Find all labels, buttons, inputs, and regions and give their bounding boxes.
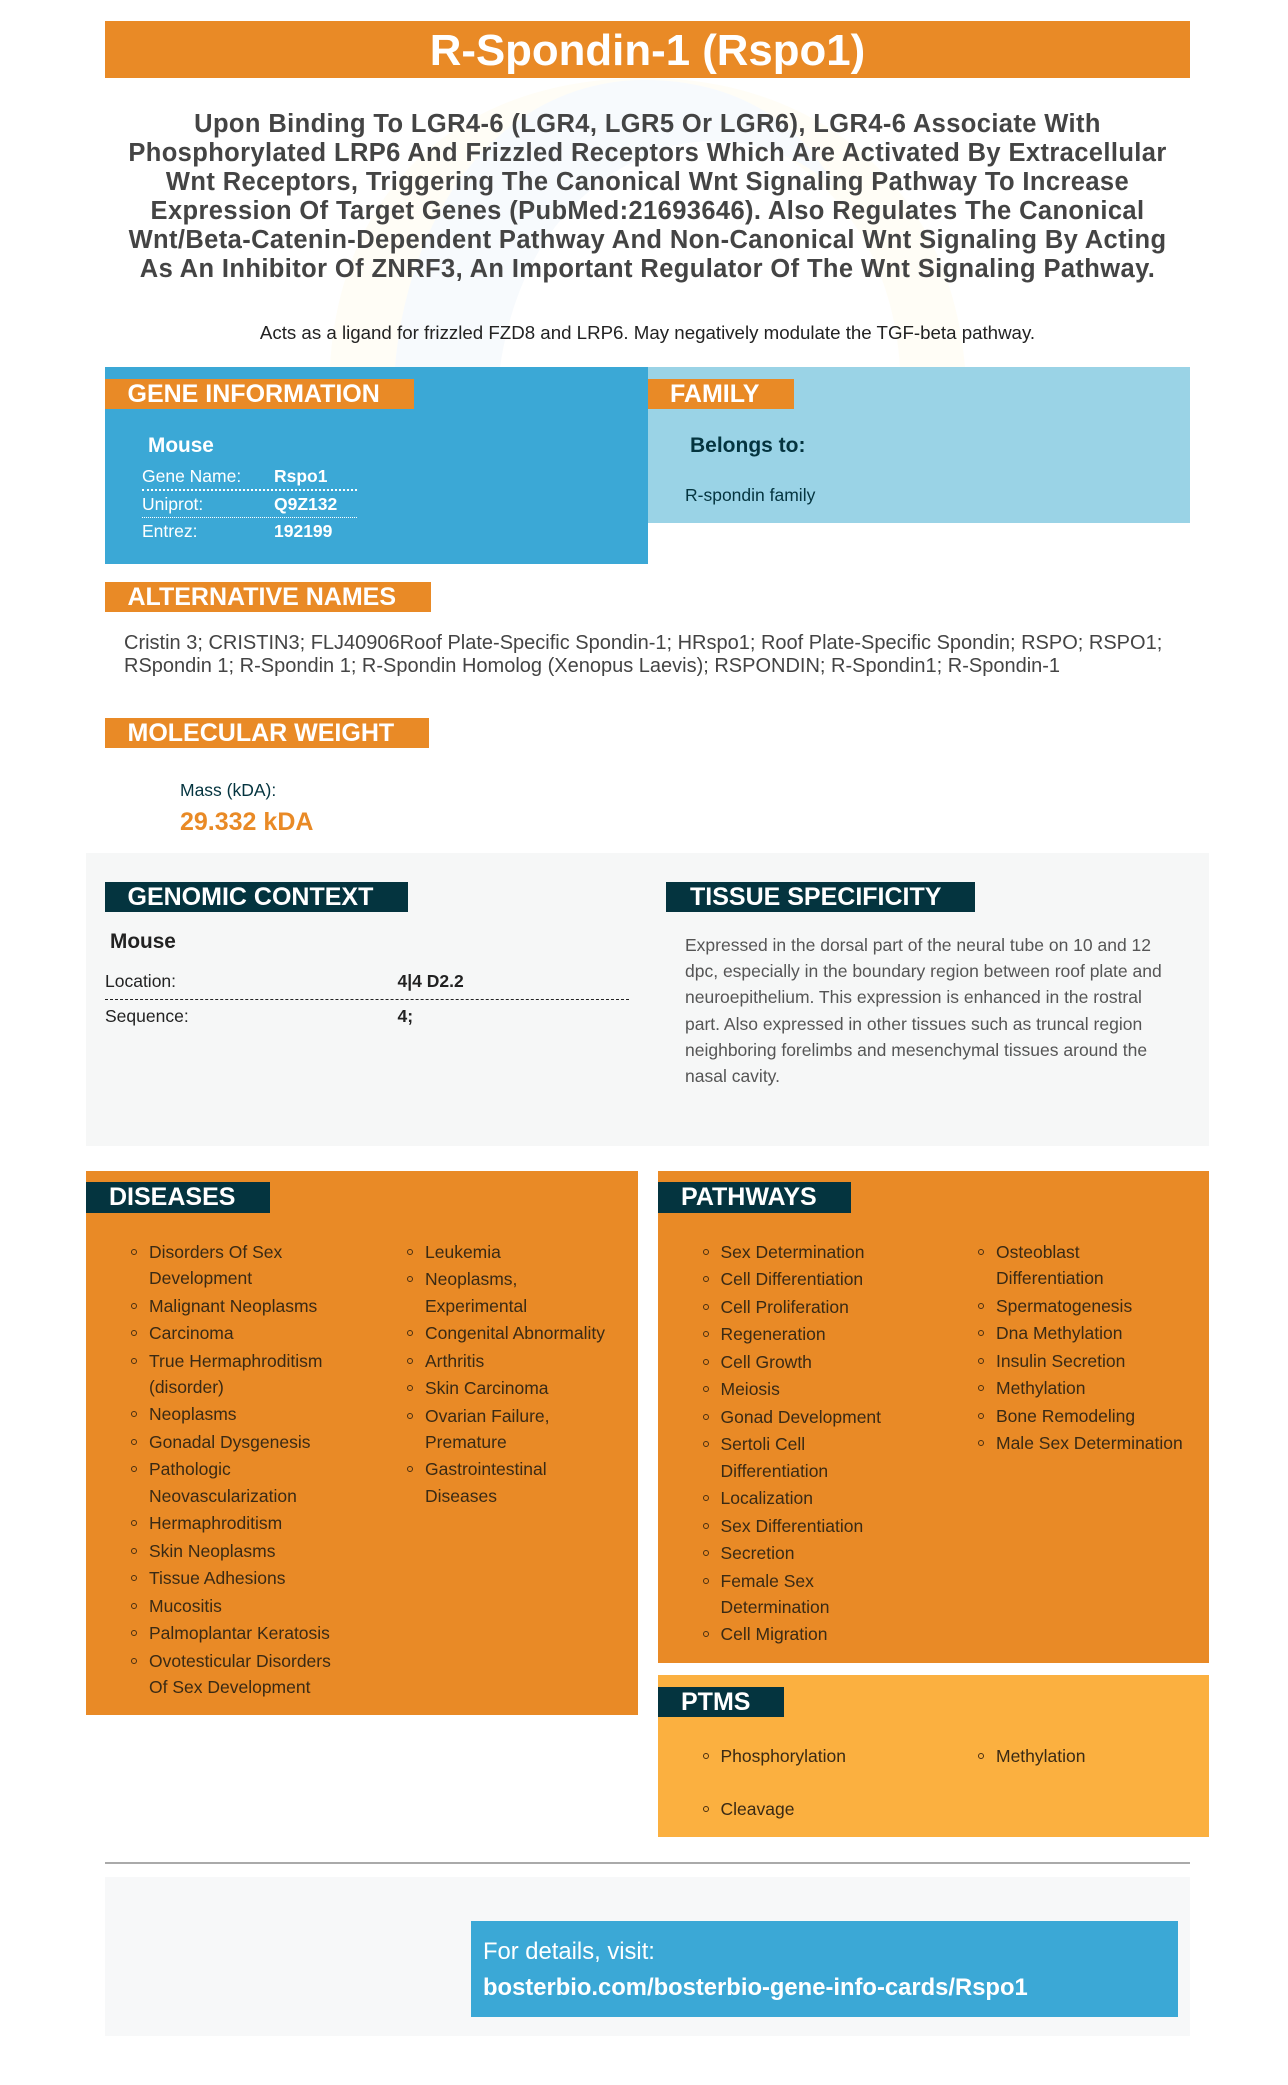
genomic rows <box>105 971 629 1026</box>
summary text <box>128 110 1167 282</box>
diseases list column 1: Skin Neoplasms <box>149 1541 275 1561</box>
diseases list column 1: Pathologic <box>149 1459 231 1479</box>
diseases list column 1: Malignant Neoplasms <box>149 1296 317 1316</box>
diseases list column 2: Neoplasms, <box>425 1269 517 1289</box>
pathways list column 1: Cell Growth <box>720 1352 812 1372</box>
panel: pathways <box>658 1171 1209 1663</box>
pathways list column 2: Spermatogenesis <box>996 1296 1132 1316</box>
genomic rows: 4; <box>398 1006 413 1026</box>
diseases list column 1: Neoplasms <box>149 1404 237 1424</box>
ptms list: Cleavage <box>720 1799 794 1819</box>
pathways list column 1: Cell Migration <box>720 1624 827 1644</box>
gene rows: Uniprot: <box>142 494 203 514</box>
ptms list: Methylation <box>996 1746 1086 1766</box>
belongs to label: Belongs to: <box>690 434 806 457</box>
panel: footer <box>105 1877 1190 2036</box>
heading: alternative names: ALTERNATIVE NAMES <box>128 583 396 611</box>
gene rows: Q9Z132 <box>274 494 337 514</box>
details label: For details, visit: <box>483 1938 655 1965</box>
pathways list column 1: Localization <box>720 1488 813 1508</box>
diseases list column 1: Carcinoma <box>149 1323 234 1343</box>
pathways list column 1: Determination <box>720 1597 829 1617</box>
panel: ptms <box>658 1675 1209 1837</box>
summary text: Expression Of Target Genes (PubMed:21693646). Also Regulates The Canonical <box>151 196 1144 224</box>
pathways list column 2: Differentiation <box>996 1268 1104 1288</box>
diseases list column 1: Hermaphroditism <box>149 1513 282 1533</box>
heading: genomic context: GENOMIC CONTEXT <box>128 883 373 911</box>
tissue specificity text: neuroepithelium. This expression is enhanced in the rostral <box>685 987 1142 1007</box>
summary text: Wnt Receptors, Triggering The Canonical Wnt Signaling Pathway To Increase <box>166 168 1129 196</box>
heading: family: FAMILY <box>670 380 759 408</box>
pathways list column 2: Osteoblast <box>996 1242 1080 1262</box>
tissue specificity text: part. Also expressed in other tissues such as truncal region <box>685 1014 1142 1034</box>
heading: pathways: PATHWAYS <box>681 1183 817 1211</box>
diseases list column 2: Experimental <box>425 1296 527 1316</box>
diseases list column 2 <box>407 1242 605 1506</box>
heading: ptms: PTMS <box>681 1688 750 1716</box>
summary text: As An Inhibitor Of ZNRF3, An Important Regulator Of The Wnt Signaling Pathway. <box>140 254 1155 282</box>
alternative names text <box>124 632 1162 676</box>
title <box>105 21 1190 78</box>
pathways list column 1: Gonad Development <box>720 1407 881 1427</box>
species: Mouse <box>148 434 214 457</box>
pathways list column 1: Regeneration <box>720 1324 826 1344</box>
title: R-Spondin-1 (Rspo1) <box>430 26 865 75</box>
species: Mouse <box>110 930 176 953</box>
diseases list column 1: Neovascularization <box>149 1486 297 1506</box>
pathways list column 1: Differentiation <box>720 1461 828 1481</box>
diseases list column 1: Development <box>149 1268 252 1288</box>
pathways list column 1 <box>703 1242 881 1644</box>
summary text: Wnt/Beta-Catenin-Dependent Pathway And Non-Canonical Wnt Signaling By Acting <box>129 226 1166 254</box>
gene rows: Entrez: <box>142 521 197 541</box>
diseases list column 1: True Hermaphroditism <box>149 1351 322 1371</box>
genomic rows: 4|4 D2.2 <box>398 971 464 991</box>
tissue specificity text <box>685 935 1162 1086</box>
mass label: Mass (kDA): <box>180 780 276 800</box>
tissue specificity text: dpc, especially in the boundary region between roof plate and <box>685 961 1162 981</box>
pathways list column 1: Secretion <box>720 1543 794 1563</box>
summary text: Upon Binding To LGR4-6 (LGR4, LGR5 Or LGR6), LGR4-6 Associate With <box>194 110 1101 138</box>
gene rows: 192199 <box>274 521 332 541</box>
family value: R-spondin family <box>685 485 815 505</box>
heading: diseases <box>86 1182 270 1213</box>
pathways list column 1: Sex Differentiation <box>720 1516 863 1536</box>
pathways list column 1: Cell Proliferation <box>720 1297 849 1317</box>
diseases list column 1: Mucositis <box>149 1596 222 1616</box>
alternative names text: Cristin 3; CRISTIN3; FLJ40906Roof Plate-Specific Spondin-1; HRspo1; Roof Plate-Specific Spondin; RSPO; RSPO1; <box>124 632 1162 654</box>
panel: family <box>648 367 1190 523</box>
heading: ptms <box>658 1687 784 1717</box>
heading: molecular weight: MOLECULAR WEIGHT <box>128 719 394 747</box>
diseases list column 1: Disorders Of Sex <box>149 1242 282 1262</box>
function note: Acts as a ligand for frizzled FZD8 and LRP6. May negatively modulate the TGF-beta pathway. <box>260 322 1035 343</box>
watermark logo <box>330 78 965 367</box>
panel: gene information <box>105 367 648 564</box>
diseases list column 1: Palmoplantar Keratosis <box>149 1623 330 1643</box>
gene rows: Rspo1 <box>274 466 327 486</box>
pathways list column 2: Methylation <box>996 1378 1086 1398</box>
diseases list column 1: (disorder) <box>149 1377 224 1397</box>
diseases list column 2: Congenital Abnormality <box>425 1323 605 1343</box>
heading: tissue specificity: TISSUE SPECIFICITY <box>690 883 941 911</box>
diseases list column 2: Gastrointestinal <box>425 1459 547 1479</box>
diseases list column 2: Leukemia <box>425 1242 501 1262</box>
heading: diseases: DISEASES <box>109 1183 235 1211</box>
heading: gene information: GENE INFORMATION <box>128 380 380 408</box>
pathways list column 2: Insulin Secretion <box>996 1351 1125 1371</box>
pathways list column 2 <box>978 1242 1183 1453</box>
diseases list column 2: Skin Carcinoma <box>425 1378 549 1398</box>
ptms list <box>703 1746 1086 1819</box>
pathways list column 1: Sex Determination <box>720 1242 864 1262</box>
pathways list column 2: Male Sex Determination <box>996 1433 1183 1453</box>
details url: bosterbio.com/bosterbio-gene-info-cards/Rspo1 <box>483 1974 1028 2001</box>
diseases list column 2: Diseases <box>425 1486 497 1506</box>
tissue specificity text: neighboring forelimbs and mesenchymal tissues around the <box>685 1040 1147 1060</box>
pathways list column 1: Sertoli Cell <box>720 1434 805 1454</box>
pathways list column 1: Meiosis <box>720 1379 780 1399</box>
heading: pathways <box>658 1182 851 1213</box>
callout: details link <box>471 1921 1178 2017</box>
diseases list column 2: Premature <box>425 1432 507 1452</box>
diseases list column 2: Arthritis <box>425 1351 484 1371</box>
pathways list column 2: Dna Methylation <box>996 1323 1122 1343</box>
gene rows: Gene Name: <box>142 466 241 486</box>
alternative names text: RSpondin 1; R-Spondin 1; R-Spondin Homolog (Xenopus Laevis); RSPONDIN; R-Spondin1; R-Spondin-1 <box>124 654 1060 676</box>
genomic rows: Location: <box>105 971 176 991</box>
panel: diseases <box>86 1171 638 1715</box>
diseases list column 1 <box>131 1242 331 1697</box>
heading: family <box>648 379 794 409</box>
gene rows <box>142 466 357 541</box>
diseases list column 1: Tissue Adhesions <box>149 1568 286 1588</box>
summary text: Phosphorylated LRP6 And Frizzled Receptors Which Are Activated By Extracellular <box>128 138 1167 166</box>
panel: genomic context and tissue specificity <box>86 853 1209 1146</box>
tissue specificity text: Expressed in the dorsal part of the neural tube on 10 and 12 <box>685 935 1151 955</box>
mass value: 29.332 kDA <box>180 808 313 836</box>
genomic rows: Sequence: <box>105 1006 189 1026</box>
pathways list column 2: Bone Remodeling <box>996 1406 1135 1426</box>
diseases list column 1: Gonadal Dysgenesis <box>149 1432 310 1452</box>
diseases list column 1: Of Sex Development <box>149 1677 310 1697</box>
tissue specificity text: nasal cavity. <box>685 1066 780 1086</box>
pathways list column 1: Female Sex <box>720 1571 814 1591</box>
diseases list column 1: Ovotesticular Disorders <box>149 1651 331 1671</box>
ptms list: Phosphorylation <box>720 1746 846 1766</box>
pathways list column 1: Cell Differentiation <box>720 1269 863 1289</box>
diseases list column 2: Ovarian Failure, <box>425 1406 550 1426</box>
